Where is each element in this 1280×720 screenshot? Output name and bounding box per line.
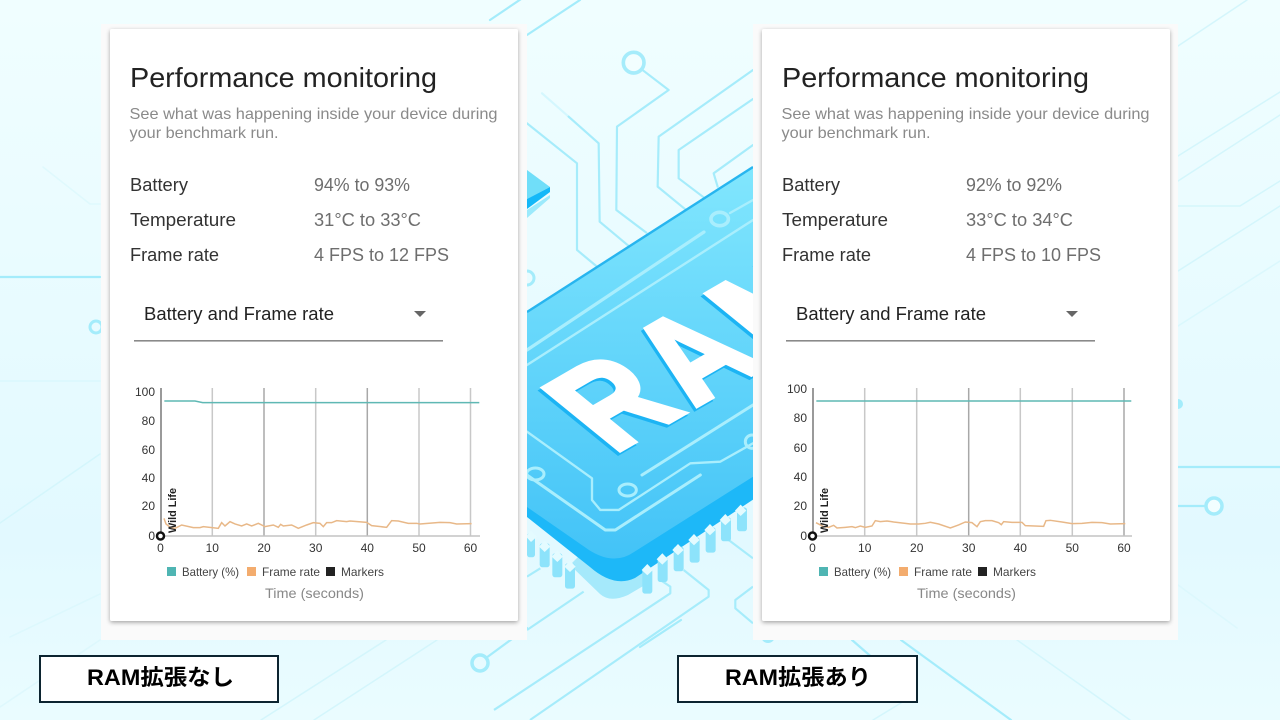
chip side	[527, 470, 760, 581]
stats table: 4 FPS to 10 FPS	[966, 245, 1101, 265]
chip top edge	[527, 167, 753, 312]
x axis labels: 60	[1117, 541, 1131, 555]
x axis labels: 0	[157, 541, 164, 555]
stats table: Frame rate	[130, 245, 219, 265]
stats table: 4 FPS to 12 FPS	[314, 245, 449, 265]
x axis labels: 50	[412, 541, 426, 555]
Wild Life marker: Wild Life	[167, 488, 179, 533]
y axis labels: 20	[794, 499, 807, 513]
x axis labels: 40	[361, 541, 374, 555]
battery line	[164, 401, 479, 403]
description: your benchmark run.	[782, 125, 930, 142]
caption: with RAM expansion: RAM拡張あり	[725, 665, 871, 690]
legend: Frame rate	[914, 565, 972, 579]
y axis labels: 0	[800, 529, 807, 543]
x axis labels: 40	[1014, 541, 1027, 555]
legend: Battery (%)	[834, 565, 891, 579]
legend	[819, 565, 1036, 579]
dropdown	[134, 304, 443, 342]
stats table: Frame rate	[782, 245, 871, 265]
y axis labels: 80	[794, 411, 807, 425]
pale chip shadow	[570, 555, 650, 599]
stats table: Battery	[782, 175, 840, 195]
y axis labels	[787, 382, 807, 543]
heading: Performance monitoring	[782, 62, 1089, 93]
legend: Markers	[993, 565, 1036, 579]
Wild Life marker: Wild Life	[819, 488, 831, 533]
x axis labels	[809, 541, 1131, 555]
y axis labels: 60	[142, 443, 155, 457]
stats table: Temperature	[130, 210, 236, 230]
small neighbouring chip	[527, 170, 550, 218]
x axis labels: 30	[309, 541, 323, 555]
stats table: 31°C to 33°C	[314, 210, 421, 230]
legend: Battery (%)	[182, 565, 239, 579]
x axis title: Time (seconds)	[265, 585, 364, 601]
y axis labels: 100	[135, 385, 155, 399]
stats table	[130, 175, 449, 265]
caption: without RAM expansion	[40, 656, 278, 702]
caption: with RAM expansion	[678, 656, 917, 702]
line chart	[787, 382, 1132, 601]
frame rate line	[164, 518, 472, 528]
Wild Life marker	[809, 488, 831, 540]
lower circuit traces	[494, 540, 753, 720]
description: your benchmark run.	[130, 125, 278, 142]
panel: RAM expansion off	[110, 29, 518, 621]
dropdown: Battery and Frame rate	[796, 304, 986, 324]
x axis labels: 10	[206, 541, 219, 555]
description	[130, 106, 497, 142]
x axis labels: 0	[809, 541, 816, 555]
x axis labels	[157, 541, 477, 555]
line chart	[135, 385, 480, 601]
y axis labels: 60	[794, 441, 807, 455]
x axis labels: 10	[858, 541, 872, 555]
panel: RAM expansion on	[762, 29, 1170, 621]
stats table: 33°C to 34°C	[966, 210, 1073, 230]
y axis labels: 100	[787, 382, 807, 396]
chip top face	[527, 137, 800, 559]
RAM chip illustration	[494, 137, 892, 720]
x axis labels: 20	[257, 541, 271, 555]
x axis labels: 60	[464, 541, 477, 555]
chip pins	[526, 505, 747, 594]
x axis title: Time (seconds)	[917, 585, 1016, 601]
legend	[167, 565, 384, 579]
RAM lettering: RAM	[511, 228, 890, 476]
x axis labels: 30	[962, 541, 976, 555]
RAM lettering: RAM	[513, 225, 892, 473]
frame rate line	[816, 520, 1125, 528]
description	[782, 106, 1150, 142]
y axis labels: 80	[142, 414, 155, 428]
caption: without RAM expansion: RAM拡張なし	[87, 665, 234, 690]
stats table: 94% to 93%	[314, 175, 410, 195]
stats table	[782, 175, 1101, 265]
legend: Markers	[341, 565, 384, 579]
stats table: Temperature	[782, 210, 888, 230]
y axis labels: 40	[794, 470, 807, 484]
chip surface traces	[527, 200, 759, 530]
y axis labels	[135, 385, 155, 543]
right panel backing	[753, 24, 1178, 640]
stats table: 92% to 92%	[966, 175, 1062, 195]
stats table: Battery	[130, 175, 188, 195]
y axis labels: 40	[142, 471, 155, 485]
legend: Frame rate	[262, 565, 320, 579]
dropdown	[786, 304, 1095, 342]
battery line	[816, 399, 1131, 403]
heading: Performance monitoring	[130, 62, 437, 93]
y axis labels: 20	[142, 499, 155, 513]
description: See what was happening inside your device during	[130, 106, 497, 123]
left panel backing	[101, 24, 527, 640]
y axis labels: 0	[148, 529, 155, 543]
description: See what was happening inside your device during	[782, 106, 1150, 123]
dropdown: Battery and Frame rate	[144, 304, 334, 324]
x axis labels: 50	[1066, 541, 1079, 555]
x axis labels: 20	[910, 541, 924, 555]
Wild Life marker	[157, 488, 179, 540]
